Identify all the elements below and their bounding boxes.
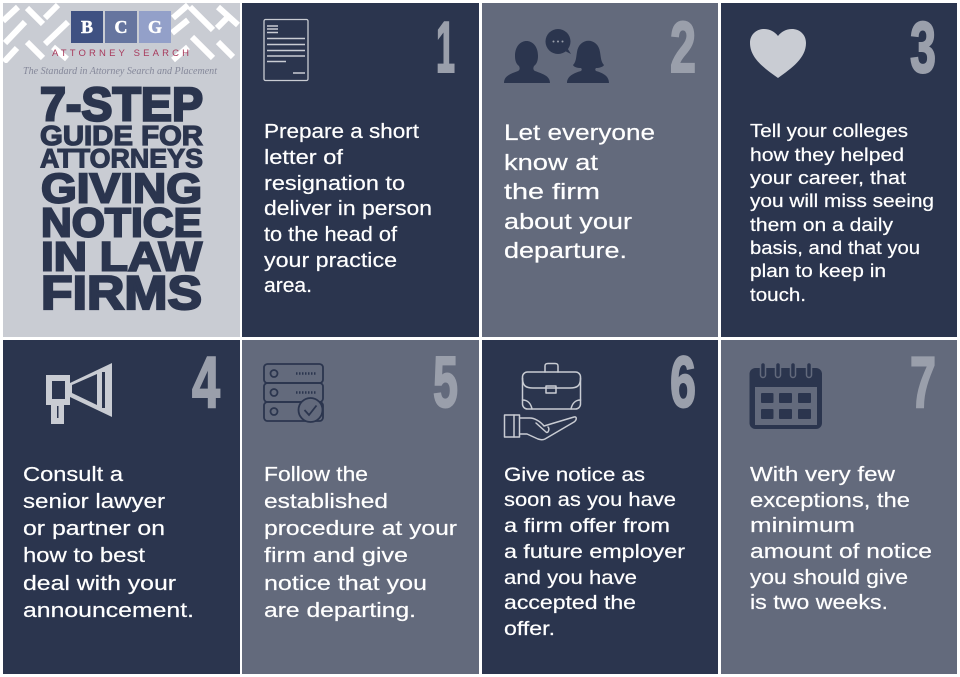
step text: a firm offer from: [504, 515, 670, 537]
step text: a future employer: [504, 541, 686, 563]
step text: accepted the: [504, 592, 636, 614]
step text: [264, 463, 457, 622]
number 2: 2: [670, 8, 696, 88]
step text: offer.: [504, 618, 555, 640]
icon: server with check: [264, 364, 323, 422]
step text: Consult a: [23, 463, 124, 486]
logo: [52, 11, 189, 59]
number 6: 6: [670, 343, 696, 423]
step text: are departing.: [264, 599, 416, 622]
logo: ATTORNEY SEARCH: [52, 48, 189, 59]
step text: how to best: [23, 544, 145, 567]
number 7: 7: [910, 343, 936, 423]
tagline: The Standard in Attorney Search and Placement: [23, 66, 218, 77]
step text: Tell your colleges: [750, 121, 908, 141]
step text: [504, 120, 655, 263]
step text: firm and give: [264, 544, 408, 567]
step text: is two weeks.: [750, 592, 888, 614]
heading: ATTORNEYS: [40, 144, 203, 174]
panel: step 3: [721, 3, 957, 337]
number 3: 3: [910, 8, 936, 88]
panel: step 6: [482, 340, 718, 674]
heading: FIRMS: [41, 266, 202, 319]
step text: the firm: [504, 179, 600, 204]
step text: Let everyone: [504, 120, 655, 145]
step text: minimum: [750, 515, 855, 537]
step text: [264, 121, 432, 297]
heading: [40, 78, 203, 319]
panel: step 2: [482, 3, 718, 337]
step text: procedure at your: [264, 517, 457, 540]
step text: letter of: [264, 147, 344, 169]
step text: your career, that: [750, 168, 906, 188]
step text: know at: [504, 150, 598, 175]
panel: step 1: [242, 3, 479, 337]
icon: two people talking: [504, 29, 609, 83]
step text: notice that you: [264, 572, 427, 595]
step text: established: [264, 490, 388, 513]
step text: area.: [264, 275, 312, 297]
step text: announcement.: [23, 599, 194, 622]
logo: G: [148, 17, 162, 37]
step text: [750, 464, 932, 614]
step text: plan to keep in: [750, 261, 886, 281]
step text: you should give: [750, 567, 908, 589]
logo: C: [114, 17, 128, 37]
icon: document: [264, 20, 308, 80]
step text: departure.: [504, 238, 627, 263]
step text: resignation to: [264, 173, 405, 195]
icon: hand holding briefcase: [504, 364, 580, 440]
step text: you will miss seeing: [750, 191, 934, 211]
icon: megaphone: [46, 363, 112, 424]
step text: soon as you have: [504, 489, 676, 511]
step text: amount of notice: [750, 541, 932, 563]
panel: step 1: 1: [436, 8, 455, 88]
step text: basis, and that you: [750, 238, 920, 258]
step text: [23, 463, 194, 622]
heading: GUIDE FOR: [40, 120, 203, 151]
step text: deliver in person: [264, 198, 432, 220]
logo: B: [81, 17, 93, 37]
step text: Prepare a short: [264, 121, 419, 143]
number 4: 4: [192, 343, 220, 423]
icon: heart: [750, 29, 806, 78]
step text: your practice: [264, 250, 397, 272]
step text: and you have: [504, 567, 637, 589]
step text: deal with your: [23, 572, 176, 595]
step text: senior lawyer: [23, 490, 165, 513]
step text: Give notice as: [504, 464, 645, 486]
panel: step 5: [242, 340, 479, 674]
icon: calendar: [750, 365, 822, 429]
step text: them on a daily: [750, 215, 893, 235]
step text: Follow the: [264, 463, 368, 486]
panel: step 7: [721, 340, 957, 674]
step text: about your: [504, 209, 632, 234]
panel: title: [3, 3, 240, 337]
step text: to the head of: [264, 224, 397, 246]
step text: [504, 464, 686, 640]
heading: 7-STEP: [40, 78, 203, 130]
panel: step 4: [3, 340, 240, 674]
step text: [750, 121, 934, 305]
heading: GIVING: [41, 164, 202, 212]
step text: how they helped: [750, 145, 904, 165]
step text: or partner on: [23, 517, 165, 540]
step text: touch.: [750, 285, 806, 305]
heading: NOTICE: [41, 200, 202, 246]
step text: With very few: [750, 464, 896, 486]
step text: exceptions, the: [750, 490, 910, 512]
herringbone pattern: [3, 5, 238, 62]
number 5: 5: [433, 343, 458, 423]
heading: IN LAW: [41, 234, 203, 280]
